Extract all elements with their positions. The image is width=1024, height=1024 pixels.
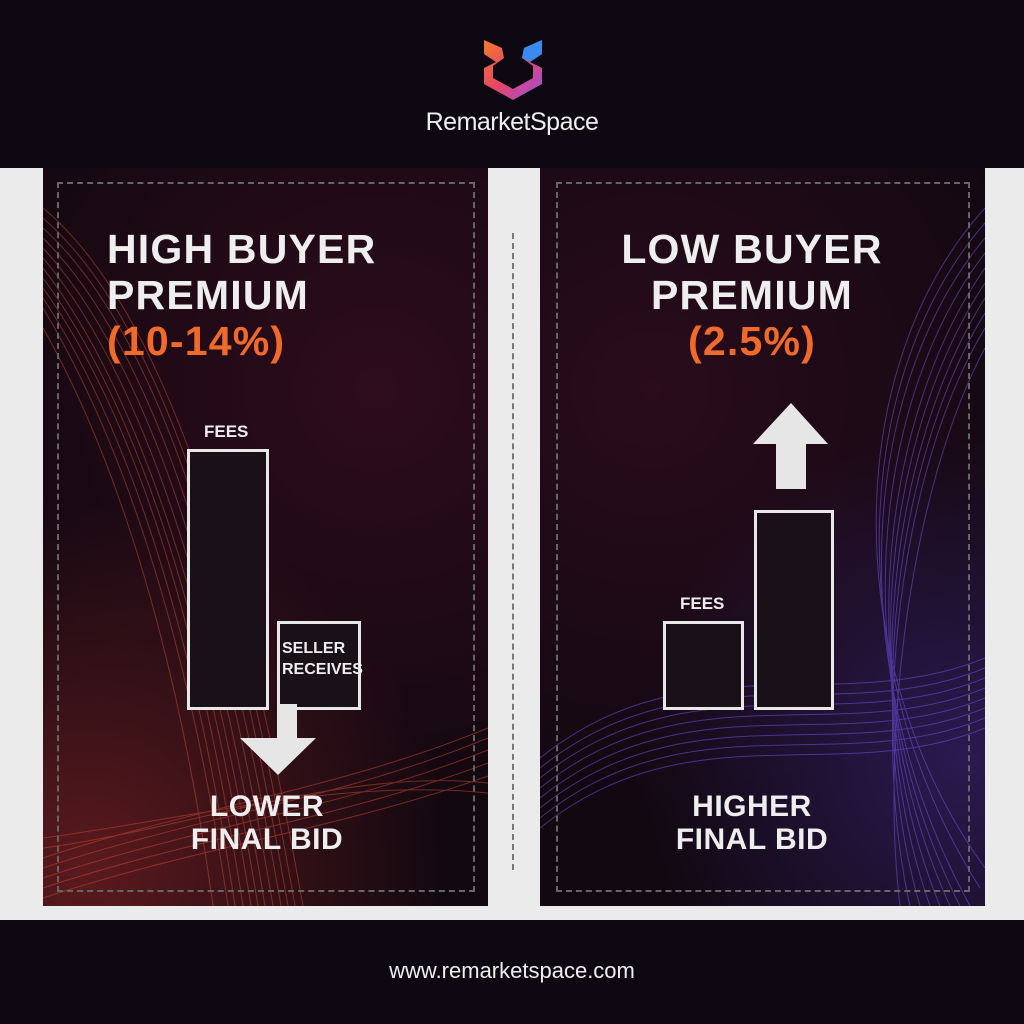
bar: seller receives: SELLER — [282, 640, 345, 657]
text: higher final bid: HIGHER — [692, 790, 812, 823]
text: lower final bid: FINAL BID — [191, 823, 343, 856]
panel: high buyer premium — [43, 168, 488, 906]
title: low buyer premium: (2.5%) — [688, 318, 816, 364]
text: lower final bid — [191, 790, 343, 856]
bar: seller receives: RECEIVES — [282, 661, 363, 678]
title: high buyer premium: PREMIUM — [107, 272, 309, 318]
title: high buyer premium: (10-14%) — [107, 318, 285, 364]
title: low buyer premium: LOW BUYER — [621, 226, 883, 272]
bar: fees tall — [187, 449, 269, 710]
label: fees right: FEES — [680, 594, 724, 613]
text: lower final bid: LOWER — [210, 790, 324, 823]
title: low buyer premium — [621, 226, 883, 364]
label: fees left: FEES — [204, 422, 248, 441]
divider dashed — [512, 233, 514, 870]
bar: fees short — [663, 621, 744, 710]
panel: low buyer premium — [540, 168, 985, 906]
title: low buyer premium: PREMIUM — [651, 272, 853, 318]
arrow up — [753, 403, 828, 489]
bar: seller tall — [754, 510, 834, 710]
footer band — [0, 920, 1024, 1024]
brand name: RemarketSpace — [426, 108, 598, 136]
text: higher final bid: FINAL BID — [676, 823, 828, 856]
title: high buyer premium: HIGH BUYER — [107, 226, 376, 272]
header band — [0, 0, 1024, 168]
arrow down — [240, 704, 316, 775]
title: high buyer premium — [107, 226, 376, 364]
footer url: www.remarketspace.com — [389, 958, 635, 983]
logo icon — [484, 40, 542, 100]
bar: seller receives — [277, 621, 361, 710]
text: higher final bid — [676, 790, 828, 856]
